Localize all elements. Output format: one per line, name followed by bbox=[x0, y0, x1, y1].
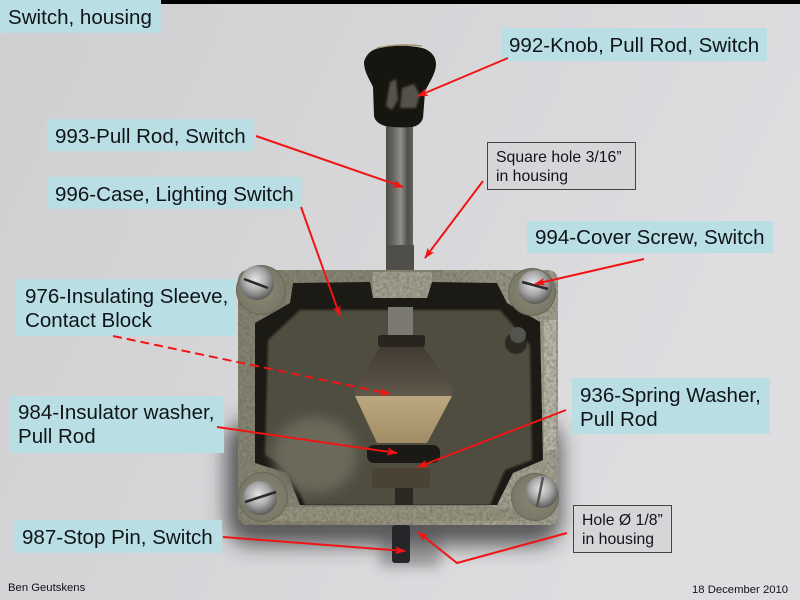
label: 976 insulating sleeve: Contact Block bbox=[25, 309, 152, 332]
note: square hole bbox=[488, 142, 636, 190]
title label: Switch, housing bbox=[8, 6, 152, 29]
lower shaft bbox=[395, 488, 413, 505]
arrow: stop pin bbox=[223, 537, 405, 551]
floor light patch bbox=[273, 417, 357, 493]
arrow: pull rod bbox=[256, 136, 403, 187]
label: 976 insulating sleeve: 976-Insulating Sleeve, bbox=[25, 285, 228, 308]
screw: top right bbox=[508, 268, 556, 316]
square shaft bbox=[388, 307, 413, 335]
frame top tab bbox=[372, 272, 432, 298]
label: 936 spring washer: 936-Spring Washer, bbox=[580, 384, 761, 407]
arrow: case bbox=[301, 207, 340, 316]
contact block upper half bbox=[355, 347, 452, 396]
case frame bbox=[238, 270, 558, 525]
label: 992 knob: 992-Knob, Pull Rod, Switch bbox=[509, 34, 759, 57]
label: 984 insulator washer: Pull Rod bbox=[18, 425, 96, 448]
insulator washer bbox=[367, 445, 440, 463]
stop pin bbox=[392, 525, 410, 563]
arrow: insulating sleeve (dashed) bbox=[113, 336, 390, 394]
photo: switch housing assembly bbox=[226, 45, 561, 567]
screw: bottom left bbox=[238, 472, 288, 522]
arrow: round hole bbox=[418, 532, 567, 563]
contact block collar bbox=[378, 335, 425, 347]
label: 984 insulator washer: 984-Insulator washer, bbox=[18, 401, 214, 424]
arrow: square hole bbox=[425, 181, 483, 258]
frame texture bbox=[238, 270, 558, 525]
label: 993 pull rod bbox=[47, 119, 254, 151]
arrow: knob bbox=[418, 58, 508, 96]
label: 984 insulator washer bbox=[10, 396, 224, 453]
credit: date: 18 December 2010 bbox=[692, 584, 788, 596]
label: 996 case bbox=[47, 177, 302, 209]
note: round hole bbox=[574, 506, 672, 552]
internal corner pin bbox=[505, 327, 527, 354]
note: square hole: Square hole 3/16” bbox=[496, 149, 622, 166]
screw: top left bbox=[236, 265, 286, 315]
label: 976 insulating sleeve bbox=[16, 279, 236, 336]
screw: bottom right bbox=[511, 473, 559, 521]
label: 994 cover screw: 994-Cover Screw, Switch bbox=[535, 226, 765, 249]
label: 993 pull rod: 993-Pull Rod, Switch bbox=[55, 125, 246, 148]
label: 992 knob bbox=[501, 28, 767, 61]
top black edge bbox=[161, 0, 800, 4]
arrow: insulator washer bbox=[217, 427, 397, 453]
case cavity bbox=[255, 282, 543, 505]
contact block lower half bbox=[355, 396, 452, 443]
knob bbox=[364, 45, 436, 127]
label: 987 stop pin bbox=[14, 520, 222, 553]
label: 936 spring washer: Pull Rod bbox=[580, 408, 658, 431]
arrow: spring washer bbox=[418, 410, 566, 467]
label: 987 stop pin: 987-Stop Pin, Switch bbox=[22, 526, 213, 549]
label: 996 case: 996-Case, Lighting Switch bbox=[55, 183, 294, 206]
note: round hole: in housing bbox=[582, 531, 654, 548]
credit: author: Ben Geutskens bbox=[8, 582, 86, 594]
arrow: cover screw bbox=[535, 259, 644, 284]
title label bbox=[0, 0, 161, 33]
note: square hole: in housing bbox=[496, 168, 568, 185]
cast shadow bbox=[226, 420, 561, 567]
nut bbox=[372, 468, 430, 488]
note: round hole: Hole Ø 1/8” bbox=[582, 512, 663, 529]
frame lower edge highlight bbox=[270, 507, 520, 521]
frame right side highlight bbox=[544, 320, 556, 450]
label: 994 cover screw bbox=[527, 221, 773, 253]
cavity floor bbox=[265, 310, 532, 505]
pull rod bbox=[386, 125, 414, 270]
label: 936 spring washer bbox=[572, 378, 770, 434]
